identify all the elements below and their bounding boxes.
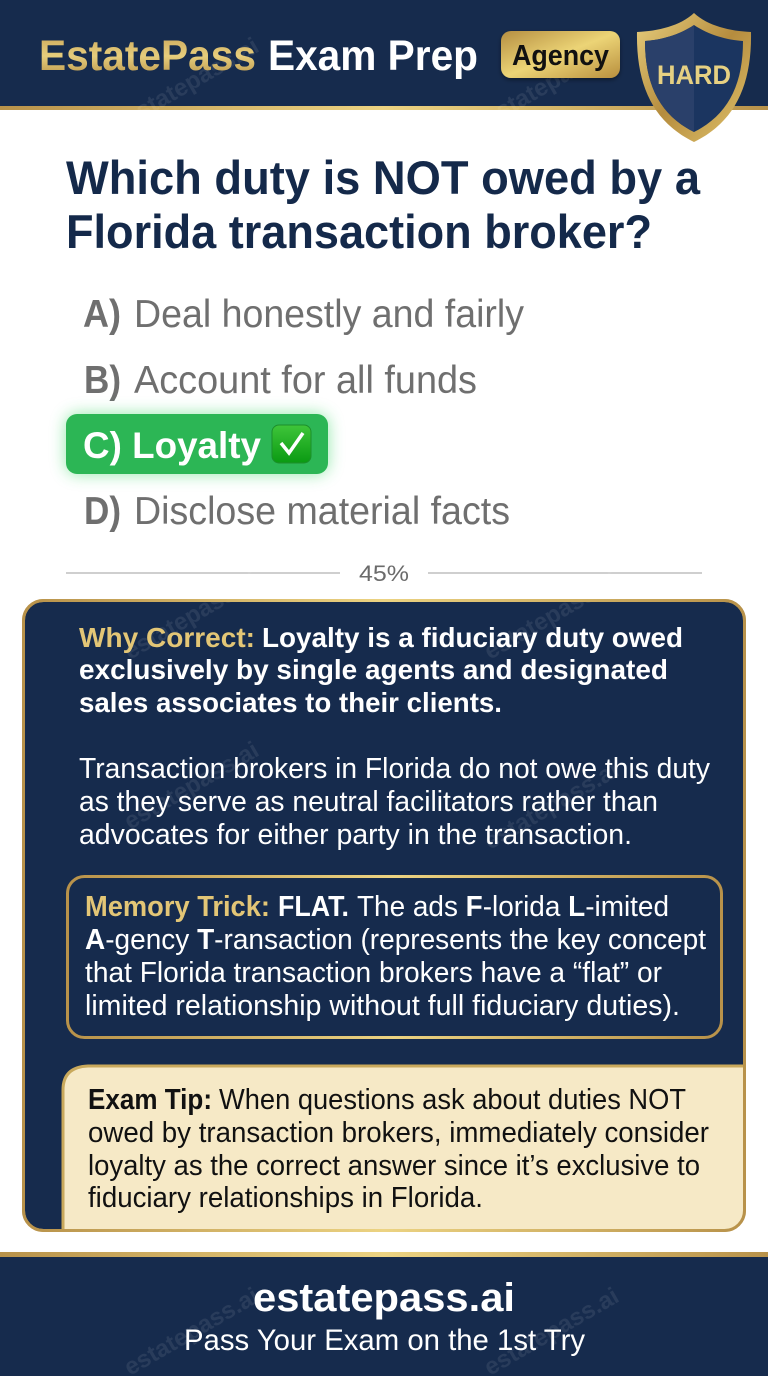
- footer tagline: Pass Your Exam on the 1st Try: [184, 1324, 585, 1357]
- progress divider 45%: 45%: [359, 561, 409, 586]
- header watermarks: estatepass.ai: [120, 32, 264, 131]
- panel watermarks: estatepass.ai: [112, 938, 256, 1037]
- panel: exam tip: When questions ask about duties NOT: [219, 1084, 686, 1116]
- option A: A): [83, 293, 121, 336]
- category badge: Agency: [501, 31, 620, 78]
- option A: Deal honestly and fairly: [134, 293, 525, 336]
- panel: memory trick: A-gency T-ransaction (represents the key concept: [85, 924, 706, 956]
- panel: exam tip: loyalty as the correct answer since it’s exclusive to: [88, 1150, 700, 1182]
- panel: exam tip: fiduciary relationships in Florida.: [88, 1182, 483, 1214]
- panel watermarks: estatepass.ai: [120, 736, 264, 835]
- transaction broker explanation: Transaction brokers in Florida do not owe this duty: [79, 753, 710, 785]
- panel watermarks: estatepass.ai: [480, 566, 624, 665]
- footer watermarks: [120, 1282, 624, 1376]
- option B: Account for all funds: [134, 359, 477, 402]
- option D: Disclose material facts: [134, 490, 510, 533]
- category badge: Agency: Agency: [512, 40, 609, 72]
- why correct text: exclusively by single agents and designated: [79, 654, 668, 685]
- panel: memory trick: that Florida transaction brokers have a “flat” or: [85, 957, 662, 989]
- panel: memory trick: [68, 876, 722, 1038]
- why correct text: [79, 622, 683, 718]
- question: Which duty is NOT owed by a: [66, 152, 701, 205]
- why correct text: sales associates to their clients.: [79, 687, 502, 718]
- title: Exam Prep: [268, 32, 478, 80]
- option C: correct answer: [66, 414, 328, 474]
- header watermarks: estatepass.ai: [480, 32, 624, 131]
- footer band: [0, 1252, 768, 1376]
- icon: HARD shield: [637, 13, 751, 142]
- header band: [0, 0, 768, 110]
- transaction broker explanation: advocates for either party in the transaction.: [79, 819, 632, 851]
- icon: HARD shield: HARD: [657, 60, 731, 90]
- panel: memory trick: Memory Trick:: [85, 891, 270, 923]
- transaction broker explanation: [79, 753, 710, 851]
- header watermarks: [120, 32, 624, 131]
- panel: exam tip: owed by transaction brokers, immediately consider: [88, 1117, 709, 1149]
- title: EstatePass: [39, 32, 256, 80]
- panel: memory trick: limited relationship without full fiduciary duties).: [85, 990, 680, 1022]
- panel: exam tip: Exam Tip:: [88, 1084, 212, 1116]
- panel watermarks: estatepass.ai: [480, 756, 624, 855]
- panel watermarks: [112, 566, 624, 1037]
- panel: exam tip: [24, 600, 745, 1232]
- panel watermarks: estatepass.ai: [472, 938, 616, 1037]
- panel: explanation: [24, 566, 745, 1232]
- panel: memory trick: The ads F-lorida L-imited: [357, 891, 669, 923]
- title: [39, 32, 478, 80]
- transaction broker explanation: as they serve as neutral facilitators rather than: [79, 786, 658, 818]
- icon: check mark: [272, 425, 311, 463]
- why correct text: Loyalty is a fiduciary duty owed: [262, 622, 683, 653]
- option C: correct answer: C) Loyalty: [83, 425, 261, 466]
- panel watermarks: estatepass.ai: [120, 566, 264, 665]
- panel: memory trick: FLAT.: [278, 891, 349, 923]
- question: [66, 152, 701, 259]
- question: Florida transaction broker?: [66, 206, 652, 259]
- option B: B): [84, 359, 121, 402]
- option D: D): [84, 490, 121, 533]
- footer website: estatepass.ai: [253, 1276, 515, 1320]
- why correct text: Why Correct:: [79, 622, 255, 653]
